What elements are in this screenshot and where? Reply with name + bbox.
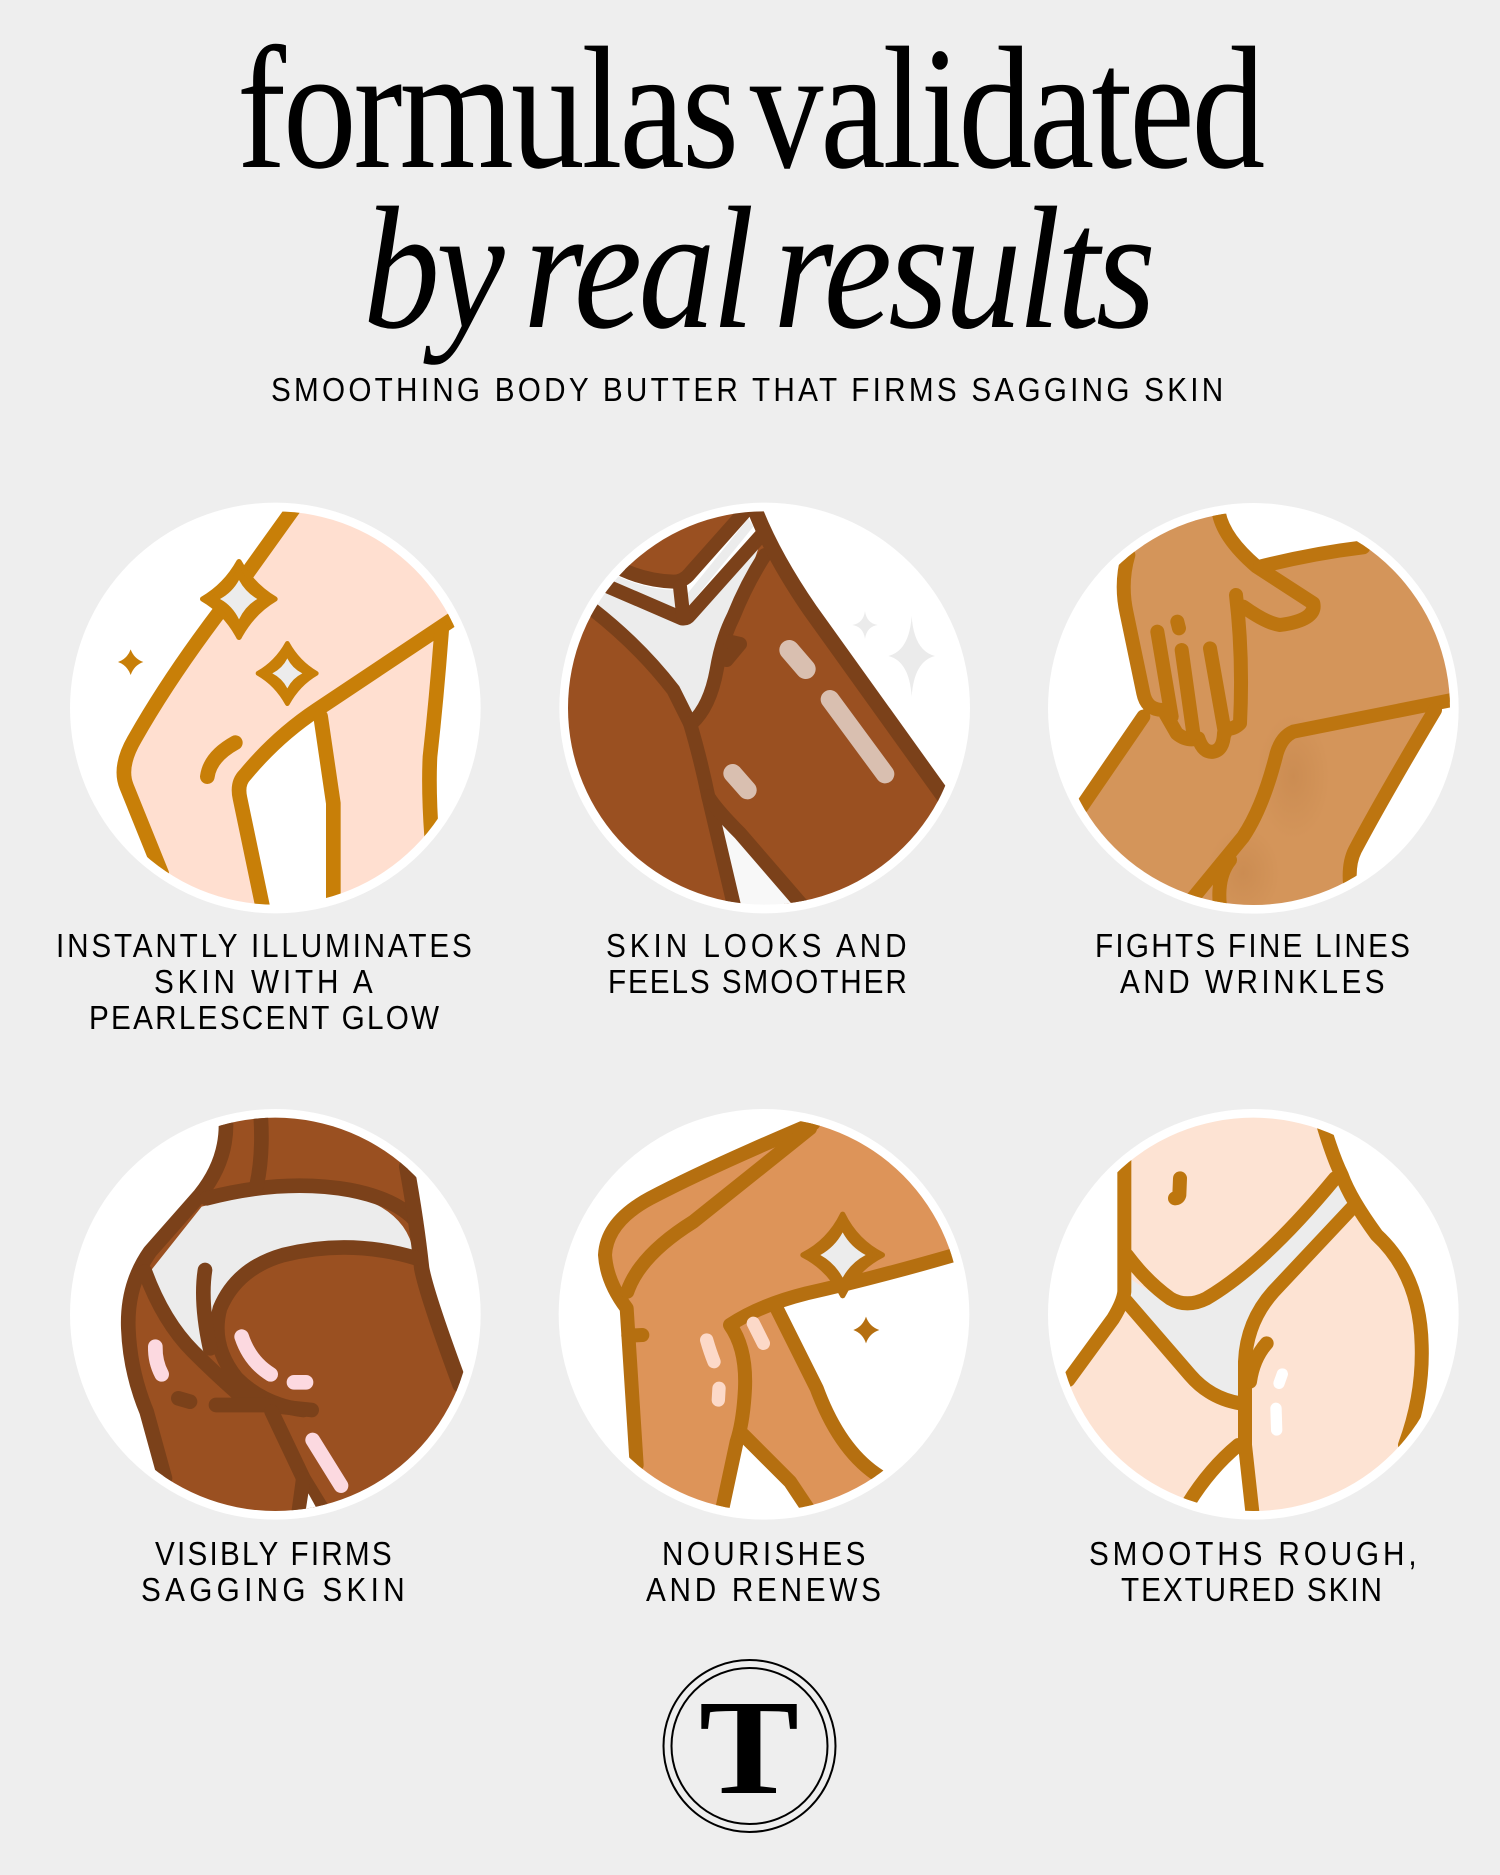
heading line: by real results: by real results — [363, 171, 1156, 365]
icon: small sparkle — [853, 1317, 879, 1343]
label: smoother — [606, 928, 907, 1000]
panel: nourishes icon — [559, 1095, 973, 1535]
label: firms: VISIBLY FIRMS — [155, 1536, 392, 1572]
label: fine lines — [1095, 928, 1410, 1000]
panel: smooths icon — [1048, 1095, 1459, 1535]
subtitle: SMOOTHING BODY BUTTER THAT FIRMS SAGGING SKIN — [271, 372, 1223, 408]
label: nourishes: NOURISHES — [662, 1536, 865, 1572]
logo outer ring — [664, 1660, 836, 1832]
highlights — [155, 1337, 341, 1486]
panel: smoother icon — [540, 500, 970, 930]
white circle — [559, 503, 970, 913]
panel: firms icon — [70, 1095, 481, 1535]
label: smooths — [1089, 1536, 1417, 1608]
label: nourishes: AND RENEWS — [646, 1572, 881, 1608]
label: firms — [141, 1536, 405, 1608]
highlights — [733, 650, 885, 790]
label: illuminates: SKIN WITH A — [154, 964, 373, 1000]
white circle — [70, 503, 481, 913]
logo inner ring — [672, 1668, 828, 1824]
label: illuminates — [56, 928, 472, 1036]
label: nourishes — [646, 1536, 881, 1608]
label: smoother: SKIN LOOKS AND — [606, 928, 907, 964]
label: smooths: TEXTURED SKIN — [1121, 1572, 1382, 1608]
white circle — [559, 1109, 969, 1520]
highlights — [707, 1323, 763, 1400]
heading line: formulas validated: formulas validated — [237, 11, 1265, 205]
illustration: bent knee — [598, 1121, 954, 1508]
illustration: buttocks with underwear — [128, 1095, 460, 1535]
panel: illuminates icon — [70, 502, 480, 914]
illustration: thigh with sparkles — [116, 512, 454, 905]
label: illuminates: INSTANTLY ILLUMINATES — [56, 928, 472, 964]
icon: small sparkle — [118, 649, 143, 675]
white circle — [70, 1109, 481, 1520]
label: smoother: FEELS SMOOTHER — [608, 964, 907, 1000]
logo letter: T — [699, 1673, 799, 1823]
icon: pale sparkles — [852, 611, 935, 697]
icon: large sparkle — [803, 1214, 882, 1296]
icon: large sparkle — [203, 562, 275, 637]
illustration: hip with underwear — [1068, 1095, 1423, 1535]
illustration: hand on thigh — [1078, 514, 1450, 905]
label: fine lines: FIGHTS FINE LINES — [1095, 928, 1410, 964]
logo — [664, 1660, 836, 1832]
icon: medium sparkle — [258, 643, 316, 704]
panel: fine lines icon — [1048, 503, 1458, 914]
label: firms: SAGGING SKIN — [141, 1572, 405, 1608]
white circle — [1048, 503, 1459, 914]
illustration: legs with underwear — [568, 511, 946, 904]
highlights — [1276, 1374, 1282, 1430]
label: fine lines: AND WRINKLES — [1120, 964, 1385, 1000]
white circle — [1048, 1109, 1459, 1520]
label: illuminates: PEARLESCENT GLOW — [89, 1000, 439, 1036]
label: smooths: SMOOTHS ROUGH, — [1089, 1536, 1417, 1572]
title — [237, 11, 1265, 365]
